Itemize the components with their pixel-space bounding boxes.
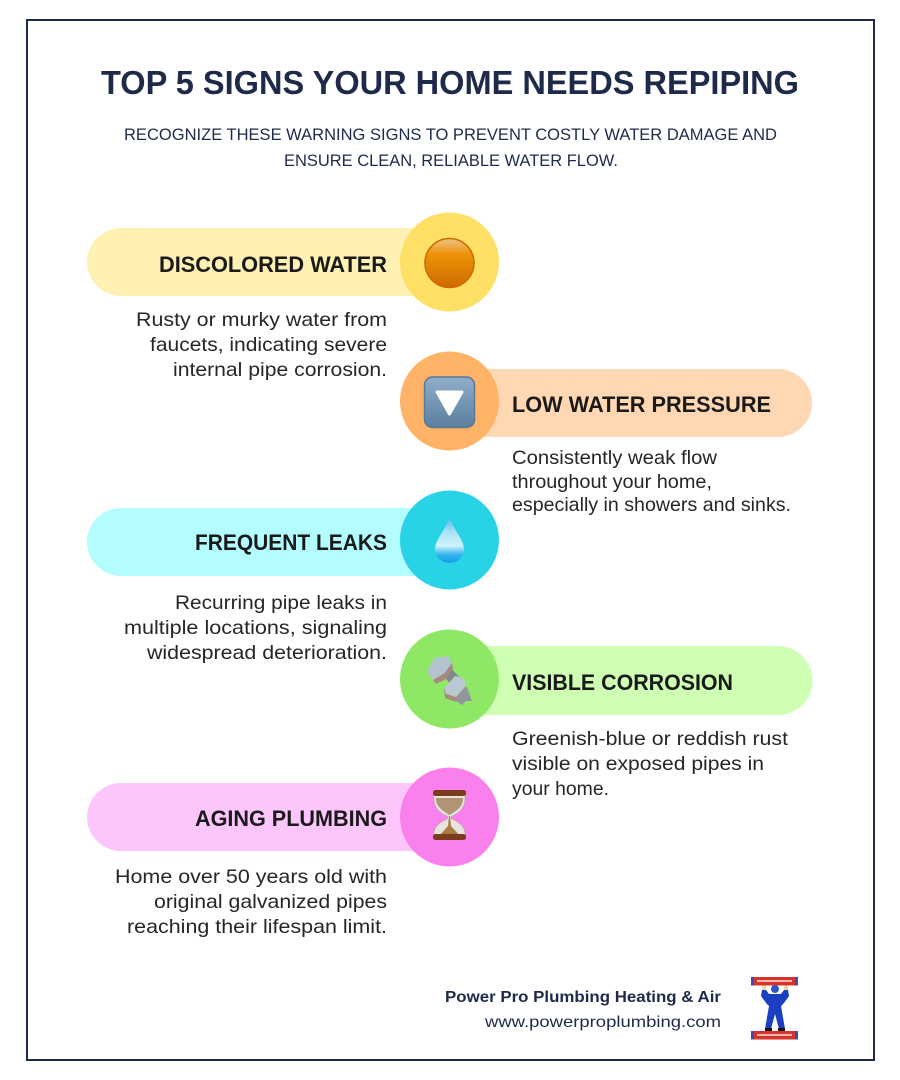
pill: aging plumbing bbox=[87, 783, 450, 851]
description: aging plumbing: Home over 50 years old with bbox=[115, 866, 387, 888]
description: frequent leaks: Recurring pipe leaks in bbox=[175, 592, 387, 614]
footer: company details bbox=[445, 989, 721, 1031]
heading: discolored water: DISCOLORED WATER bbox=[159, 252, 387, 277]
description: discolored water: internal pipe corrosion. bbox=[173, 359, 387, 381]
icon: hourglass bbox=[433, 790, 466, 840]
icon: company logo bbox=[751, 977, 798, 1040]
description: visible corrosion: visible on exposed pipes in bbox=[512, 753, 764, 775]
panel: discolored water bbox=[87, 212, 499, 381]
description: visible corrosion: Greenish-blue or reddish rust bbox=[512, 728, 789, 750]
icon circle: frequent leaks bbox=[400, 490, 499, 590]
description: low water pressure bbox=[512, 447, 791, 516]
description: frequent leaks: multiple locations, signaling bbox=[124, 617, 387, 639]
description: visible corrosion: your home. bbox=[512, 778, 609, 800]
icon circle: visible corrosion bbox=[400, 630, 499, 728]
description: discolored water: faucets, indicating severe bbox=[150, 334, 387, 356]
footer: company details: www.powerproplumbing.com bbox=[484, 1014, 721, 1031]
description: low water pressure: throughout your home, bbox=[512, 471, 712, 493]
description: aging plumbing: reaching their lifespan limit. bbox=[127, 916, 387, 938]
icon: orange circle bbox=[425, 238, 474, 288]
icon circle: aging plumbing bbox=[400, 768, 499, 866]
icon: water drop bbox=[435, 517, 464, 563]
description: visible corrosion bbox=[512, 728, 789, 800]
description: aging plumbing: original galvanized pipes bbox=[154, 891, 387, 913]
title: TOP 5 SIGNS YOUR HOME NEEDS REPIPING bbox=[101, 64, 799, 101]
icon circle: low water pressure bbox=[400, 352, 499, 450]
pill: visible corrosion bbox=[450, 646, 813, 715]
pill: discolored water bbox=[87, 228, 450, 296]
description: frequent leaks: widespread deterioration. bbox=[146, 642, 387, 664]
heading: low water pressure: LOW WATER PRESSURE bbox=[512, 392, 771, 417]
pill: low water pressure bbox=[450, 369, 812, 437]
description: low water pressure: especially in showers and sinks. bbox=[512, 494, 791, 516]
pill: frequent leaks bbox=[87, 508, 450, 576]
footer: company details: Power Pro Plumbing Heating & Air bbox=[445, 989, 721, 1006]
icon: down button bbox=[424, 377, 474, 428]
subtitle: RECOGNIZE THESE WARNING SIGNS TO PREVENT COSTLY WATER DAMAGE AND bbox=[124, 125, 777, 144]
description: low water pressure: Consistently weak flow bbox=[512, 447, 718, 469]
panel: frequent leaks bbox=[87, 490, 499, 664]
description: frequent leaks bbox=[124, 592, 387, 664]
icon circle: discolored water bbox=[400, 212, 499, 312]
heading: frequent leaks: FREQUENT LEAKS bbox=[195, 530, 387, 555]
description: aging plumbing bbox=[115, 866, 387, 938]
heading: aging plumbing: AGING PLUMBING bbox=[195, 806, 387, 831]
description: discolored water: Rusty or murky water from bbox=[136, 309, 387, 331]
panel: low water pressure bbox=[400, 352, 812, 516]
panel: visible corrosion bbox=[400, 630, 813, 800]
icon: nut and bolt bbox=[427, 656, 472, 705]
description: discolored water bbox=[136, 309, 387, 381]
panel: aging plumbing bbox=[87, 768, 499, 938]
heading: visible corrosion: VISIBLE CORROSION bbox=[512, 670, 733, 695]
subtitle: ENSURE CLEAN, RELIABLE WATER FLOW. bbox=[284, 151, 618, 170]
subtitle bbox=[124, 125, 777, 170]
